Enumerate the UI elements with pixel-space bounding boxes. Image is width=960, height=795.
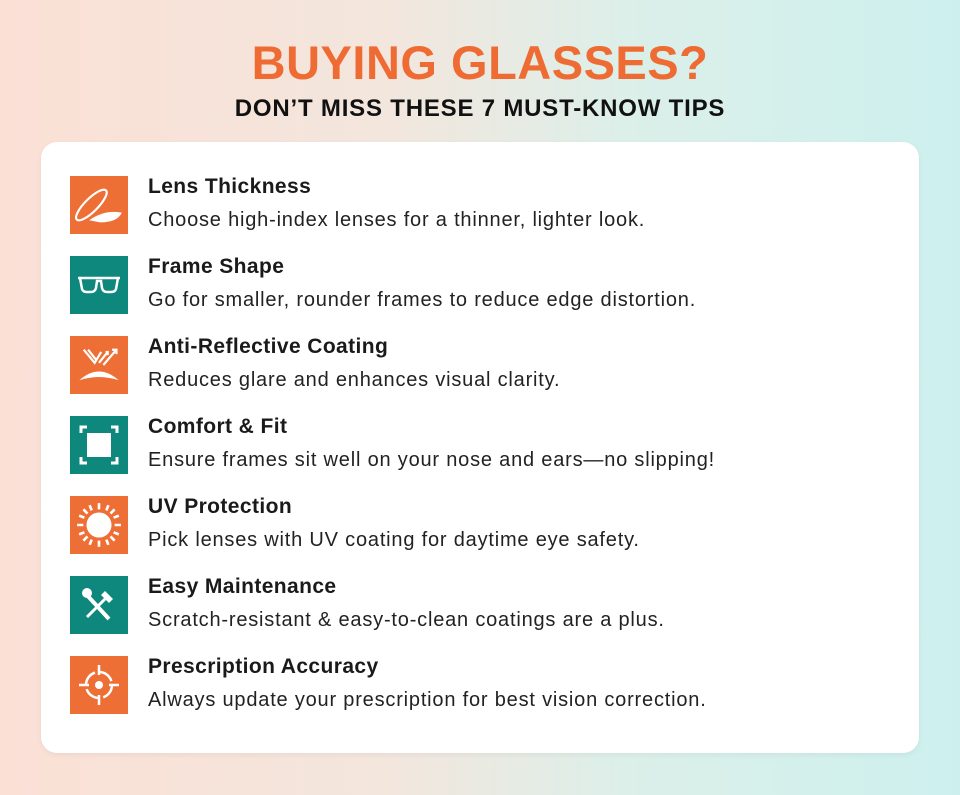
icon: glasses bbox=[70, 256, 128, 314]
tip: maintenance: Scratch-resistant & easy-to-clean coatings are a plus. bbox=[148, 609, 665, 631]
tip: comfort: Comfort & Fit bbox=[148, 415, 287, 438]
tip: frame shape: Go for smaller, rounder frames to reduce edge distortion. bbox=[148, 289, 696, 311]
tip: comfort bbox=[70, 415, 715, 474]
icon: target bbox=[70, 656, 128, 714]
tip: lens thickness: Lens Thickness bbox=[148, 175, 311, 198]
panel: tips card bbox=[41, 142, 919, 753]
tip: maintenance: Easy Maintenance bbox=[148, 575, 336, 598]
tip: anti-reflective bbox=[70, 335, 560, 394]
tip: anti-reflective: Anti-Reflective Coating bbox=[148, 335, 388, 358]
icon: reflection bbox=[70, 336, 128, 394]
tip: uv bbox=[70, 495, 640, 554]
tip: frame shape: Frame Shape bbox=[148, 255, 284, 278]
tip: maintenance bbox=[70, 575, 665, 634]
title: BUYING GLASSES? bbox=[252, 36, 708, 89]
icon: lenses bbox=[70, 176, 128, 234]
icon: sun bbox=[70, 496, 128, 554]
tip: frame shape bbox=[70, 255, 696, 314]
icon: tools bbox=[70, 576, 128, 634]
tip: prescription: Prescription Accuracy bbox=[148, 655, 379, 678]
tip: prescription: Always update your prescription for best vision correction. bbox=[148, 689, 707, 711]
subtitle: DON’T MISS THESE 7 MUST-KNOW TIPS bbox=[235, 95, 725, 122]
tip: uv: Pick lenses with UV coating for daytime eye safety. bbox=[148, 529, 640, 551]
tip: lens thickness: Choose high-index lenses for a thinner, lighter look. bbox=[148, 209, 645, 231]
tip: anti-reflective: Reduces glare and enhances visual clarity. bbox=[148, 369, 560, 391]
tip: prescription bbox=[70, 655, 707, 714]
tip: uv: UV Protection bbox=[148, 495, 292, 518]
icon: fit square bbox=[70, 416, 128, 474]
tip: comfort: Ensure frames sit well on your nose and ears—no slipping! bbox=[148, 449, 715, 471]
tip: lens thickness bbox=[70, 175, 645, 234]
